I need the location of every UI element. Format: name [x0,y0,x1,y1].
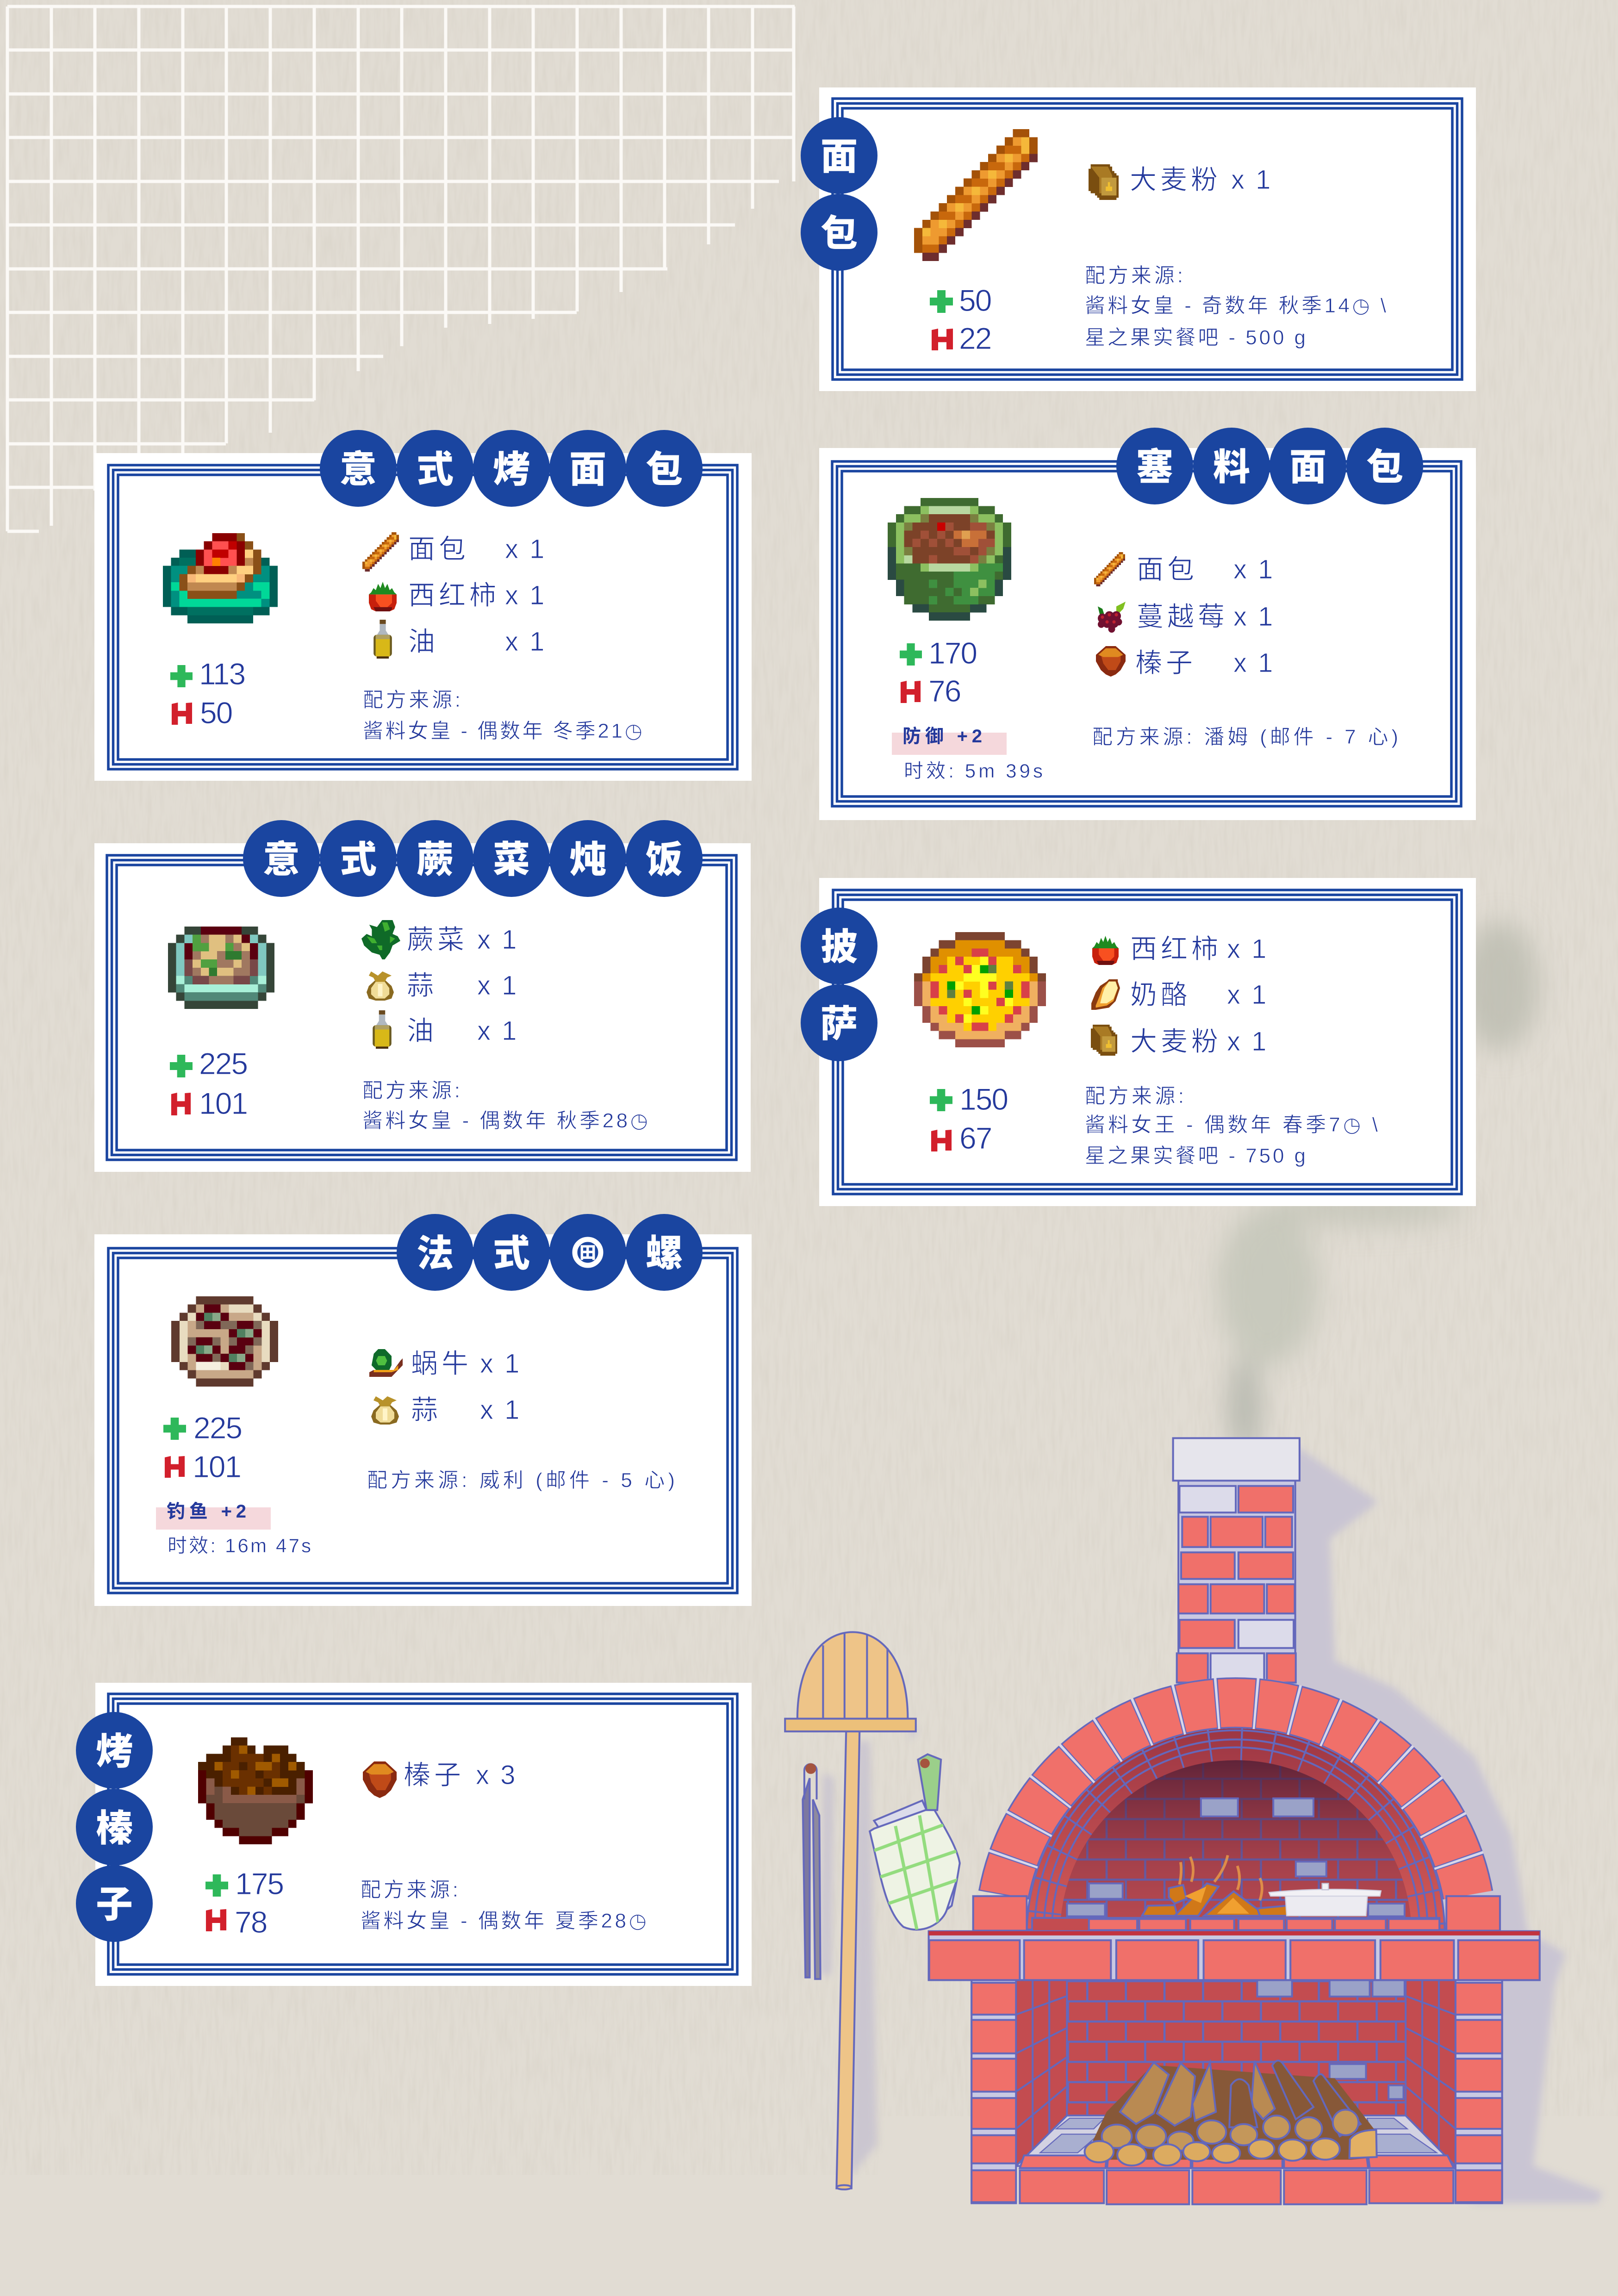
recipe source: 酱料女皇 - 偶数年 秋季28◷ [362,1109,648,1132]
fire [1142,1855,1288,1916]
recipe source: 星之果实餐吧 - 500 g [1085,326,1306,349]
recipe source: 配方来源: 潘姆 (邮件 - 7 心) [1092,726,1398,748]
panel: 法式田螺 [94,1214,752,1606]
card background [94,1234,752,1606]
ingredient: fern [361,920,518,959]
stats: 22 [959,321,991,355]
recipe source: 配方来源: [363,689,461,711]
smoke and wall shadow from the oven [1217,921,1539,1458]
white grid decoration [7,6,795,531]
ingredient: garlic: x 1 [480,1395,521,1425]
ingredient: tomato: 西红柿 [408,580,500,610]
title badges: 面 [821,136,858,177]
recipe source [362,1079,648,1132]
ingredient: bread: 面包 [1137,554,1198,585]
recipe source: 酱料女皇 - 偶数年 冬季21◷ [363,720,642,742]
title badges: 烤 [96,1731,133,1772]
ingredient: garlic: x 1 [477,971,518,1001]
panel: 意式烤面包 [94,430,752,781]
ingredient: snail: x 1 [480,1349,521,1379]
title badges: 法 [417,1233,454,1274]
firewood [1085,2060,1377,2165]
recipe source [361,1879,647,1932]
ingredient: flour [1089,164,1272,200]
title badges: 意 [340,449,377,490]
title badges: 饭 [646,839,683,880]
stats: 225 [193,1411,242,1445]
triple border [832,461,1461,806]
stats: 150 [959,1082,1008,1116]
ingredient: oil: 油 [407,1016,437,1046]
ingredient: flour [1091,1025,1268,1057]
title badges: 意 [263,839,300,880]
ingredient: bread [362,534,546,570]
ingredient: hazelnut [363,1760,517,1798]
food sprite: bruschetta [163,537,278,619]
food sprite: escargot [171,1300,278,1382]
stats [930,283,991,355]
tongs [803,1763,821,1979]
title badges: 烤 [493,449,530,490]
title badges: 包 [821,213,858,254]
title badges: 炖 [569,839,606,880]
triple border [107,855,736,1160]
title badges: 料 [1213,447,1250,488]
ingredient: snail: 蜗牛 [411,1349,472,1379]
buff: defense: 防御 +2 [902,726,982,747]
ingredient: cranberry: x 1 [1233,602,1275,632]
triple border [833,890,1462,1194]
ingredient: bread: x 1 [1233,554,1275,585]
card background [94,453,752,781]
ingredient: tomato [369,580,546,611]
ingredient: garlic: 蒜 [407,971,437,1001]
title badges: 萨 [821,1003,858,1045]
panel: 烤榛子 [76,1683,752,1986]
title badges: 菜 [493,839,530,880]
ingredient: hazelnut: 榛子 [404,1760,465,1790]
ingredient: snail [369,1349,521,1379]
stats: 225 [199,1046,247,1081]
stats [930,1082,1008,1155]
ingredient: garlic: 蒜 [411,1395,442,1425]
buff duration: 时效: 16m 47s [168,1535,311,1556]
stats: 76 [928,674,960,708]
title badges [801,908,877,1061]
stats: 101 [199,1086,247,1120]
ingredient: oil [373,1010,518,1049]
ingredient: cranberry: 蔓越莓 [1137,602,1228,632]
triple border [833,99,1462,380]
food sprite: risotto [168,931,274,1005]
title badges: 包 [646,449,683,490]
ingredient: flour: 大麦粉 [1130,165,1221,195]
front bricks [971,1980,1502,2204]
ingredient: tomato: x 1 [1227,934,1268,964]
ingredient: bread: 面包 [408,534,469,564]
chimney [1173,1438,1300,1682]
food sprite: stuffing [888,502,1011,616]
recipe source [1085,1085,1378,1167]
stats [163,1411,242,1484]
title badges: 式 [340,839,377,880]
stats: 170 [928,636,977,670]
recipe source: 配方来源: [362,1079,460,1102]
buff duration: 时效: 5m 39s [904,760,1043,782]
recipe source: 配方来源: [361,1879,458,1901]
ingredient: oil: x 1 [505,627,546,657]
arch bricks [1004,1703,1468,1895]
panel: 披萨 [801,878,1476,1206]
lower fireplace [1016,1980,1456,2166]
ingredient: hazelnut: x 1 [1233,648,1275,678]
recipe source: 配方来源: 威利 (邮件 - 5 心) [367,1469,675,1492]
ingredient: bread [1094,553,1275,585]
title badges: 包 [1366,447,1403,488]
stats: 50 [200,696,232,730]
oven wall shadow [1260,1444,1603,2203]
arch recess [1014,1727,1458,2158]
ingredient: cranberry [1098,602,1275,633]
recipe source: 酱料女王 - 偶数年 春季7◷ \ [1085,1114,1378,1136]
pier tops and back course [973,1896,1500,1931]
title badges: 塞 [1136,447,1173,488]
ingredient: flour: x 1 [1227,1027,1268,1057]
counter shelf [929,1931,1540,1980]
ingredient: cheese: 奶酪 [1130,980,1191,1010]
ingredient: fern: x 1 [477,925,518,955]
oven mitt [869,1754,960,1929]
title badges [1116,428,1423,504]
card background [819,87,1476,391]
title badges: 子 [96,1884,133,1925]
triple border [108,1694,737,1974]
title badges: 式 [493,1233,530,1274]
tool shadows [821,1725,918,2177]
stats: 50 [959,283,991,317]
ingredient: oil: 油 [408,627,439,657]
title badges: 面 [1289,447,1326,488]
stats: 175 [235,1867,283,1901]
pizza peel [785,1632,916,2190]
ingredient: tomato: 西红柿 [1130,934,1222,964]
stats: 78 [235,1905,267,1939]
title badges: 田 [579,1243,596,1262]
recipe source [363,689,642,742]
ingredient: fern: 蕨菜 [407,925,468,955]
title badges: 螺 [646,1233,683,1274]
title badges [76,1712,153,1942]
panel: 面包 [801,87,1476,391]
recipe source: 配方来源: [1085,1085,1184,1108]
stats [170,1046,247,1120]
stats: 113 [199,657,245,691]
illustration: brick oven with tools [785,1438,1603,2204]
ingredient: flour: x 1 [1231,165,1272,195]
recipe source [1085,264,1387,349]
title badges [243,820,703,897]
title badges: 面 [569,449,606,490]
food sprite: bread [914,133,1038,257]
panel: 意式蕨菜炖饭 [94,820,751,1172]
recipe source: 星之果实餐吧 - 750 g [1085,1145,1306,1167]
stats [170,657,245,730]
title badges [801,117,877,271]
recipe source: 酱料女皇 - 奇数年 秋季14◷ \ [1085,294,1387,317]
title badges: 榛 [96,1808,133,1849]
panel: 塞料面包 [819,428,1476,820]
recipe source: 酱料女皇 - 偶数年 夏季28◷ [361,1910,647,1932]
ingredient: flour: 大麦粉 [1130,1027,1222,1057]
stats: 67 [959,1121,991,1155]
buff: fishing [156,1501,271,1530]
triple border [108,465,737,769]
food sprite: roasted hazelnuts [198,1742,313,1840]
title badges [397,1214,703,1291]
ingredient: oil [373,620,546,659]
stats [205,1867,283,1939]
buff: defense [892,726,1007,755]
title badges: 蕨 [417,839,454,880]
pot [1269,1883,1381,1916]
triple border [108,1248,737,1593]
ingredient: garlic [367,971,518,1001]
title badges [320,430,703,507]
card background [94,843,751,1172]
card background [95,1683,752,1986]
card background [819,878,1476,1206]
ingredient: hazelnut: 榛子 [1135,648,1196,678]
ingredient: hazelnut: x 3 [476,1760,517,1790]
buff: fishing: 钓鱼 +2 [167,1501,246,1522]
recipe source: 配方来源: [1085,264,1183,287]
stats [900,636,977,708]
stats: 101 [193,1450,241,1484]
ingredient: cheese [1091,979,1268,1010]
title badges: 披 [821,927,858,968]
ingredient: tomato: x 1 [505,580,546,610]
ingredient: hazelnut [1096,646,1275,678]
ingredient: oil: x 1 [477,1016,518,1046]
food sprite: pizza [914,936,1046,1043]
card background [819,448,1476,820]
ingredient: tomato [1092,934,1268,965]
title badges: 式 [417,449,454,490]
ingredient: cheese: x 1 [1227,980,1268,1010]
ingredient: bread: x 1 [505,534,546,564]
ingredient: garlic [371,1395,521,1425]
